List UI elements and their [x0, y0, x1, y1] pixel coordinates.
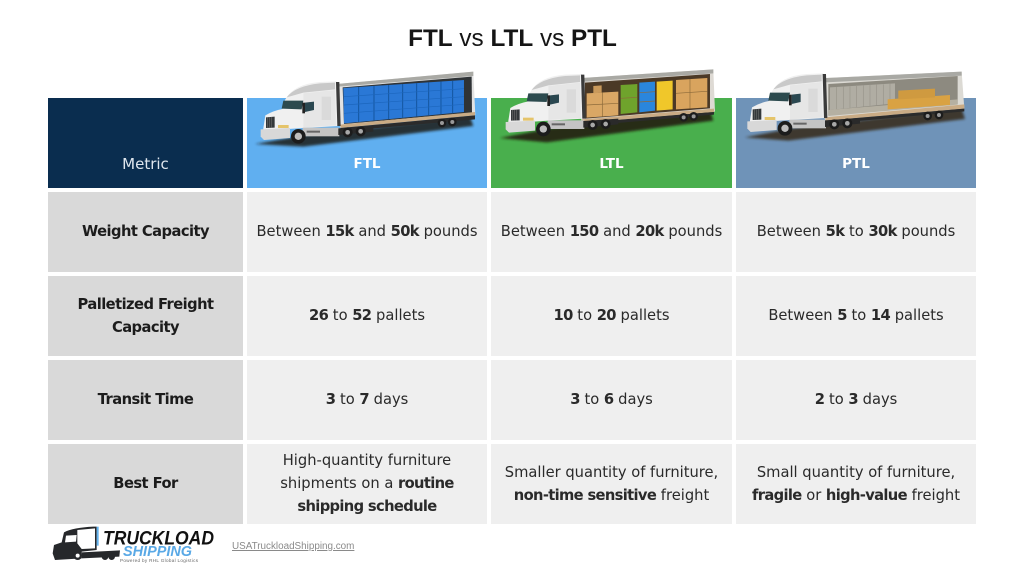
LTL best for: Smaller quantity of furniture,: [505, 464, 718, 480]
FTL best for: High-quantity furniture: [283, 452, 451, 469]
title: vs vs: [459, 25, 564, 52]
header: PTL: PTL: [842, 156, 870, 172]
FTL pallets: 26 to 52 pallets: [309, 307, 425, 324]
LTL pallets: 10 to 20 pallets: [554, 307, 669, 324]
PTL weight capacity: Between 5k to 30k pounds: [757, 223, 955, 240]
row label: transit time: [48, 360, 243, 440]
PTL pallets: Between 5 to 14 pallets: [768, 307, 944, 324]
row label: best for: [48, 444, 243, 524]
website link: USATruckloadShipping.com: [232, 541, 354, 552]
PTL weight capacity: [736, 192, 976, 272]
logo wordmark: TRUCKLOAD: [103, 528, 214, 550]
row label: transit time: Transit Time: [98, 391, 193, 408]
logo sub-wordmark: SHIPPING: [123, 544, 192, 560]
header: PTL: [736, 98, 976, 188]
row label: weight capacity: [48, 192, 243, 272]
header: metric: Metric: [122, 154, 169, 172]
PTL best for: fragile or high-value freight: [752, 486, 960, 504]
header: FTL: [247, 98, 487, 188]
header: LTL: LTL: [599, 156, 624, 172]
title: PTL: [571, 25, 617, 52]
row label: best for: Best For: [113, 475, 178, 492]
header: LTL: [491, 98, 732, 188]
title: LTL: [490, 25, 533, 52]
row label: palletized freight capacity: [48, 276, 243, 356]
LTL pallets: [491, 276, 732, 356]
title: [408, 25, 617, 52]
truck: FTL: [255, 72, 475, 147]
FTL best for: shipments on a routine: [280, 475, 454, 492]
FTL pallets: [247, 276, 487, 356]
logo icon: truck: [53, 527, 120, 560]
FTL best for: [247, 444, 487, 524]
LTL best for: [491, 444, 732, 524]
FTL best for: shipping schedule: [297, 498, 437, 515]
LTL transit time: 3 to 6 days: [570, 391, 653, 408]
row label: palletized freight capacity: Palletized Freight: [78, 296, 213, 312]
row label: palletized freight capacity: Capacity: [112, 318, 179, 336]
truck: PTL: [745, 72, 965, 141]
header: FTL: FTL: [353, 156, 381, 172]
PTL best for: [736, 444, 976, 524]
FTL weight capacity: Between 15k and 50k pounds: [256, 223, 478, 240]
PTL transit time: 2 to 3 days: [815, 391, 897, 408]
LTL weight capacity: Between 150 and 20k pounds: [501, 223, 722, 240]
LTL best for: non-time sensitive freight: [514, 486, 709, 504]
title: FTL: [408, 25, 453, 52]
row label: weight capacity: Weight Capacity: [82, 223, 209, 240]
LTL weight capacity: [491, 192, 732, 272]
PTL transit time: [736, 360, 976, 440]
LTL transit time: [491, 360, 732, 440]
logo: Truckload Shipping: [52, 526, 214, 563]
PTL pallets: [736, 276, 976, 356]
PTL best for: Small quantity of furniture,: [757, 464, 955, 480]
FTL transit time: 3 to 7 days: [326, 391, 408, 408]
FTL transit time: [247, 360, 487, 440]
truck: LTL: [500, 69, 715, 142]
FTL weight capacity: [247, 192, 487, 272]
header: metric: [48, 98, 243, 188]
logo tagline: Powered by RHL Global Logistics: [120, 558, 199, 563]
